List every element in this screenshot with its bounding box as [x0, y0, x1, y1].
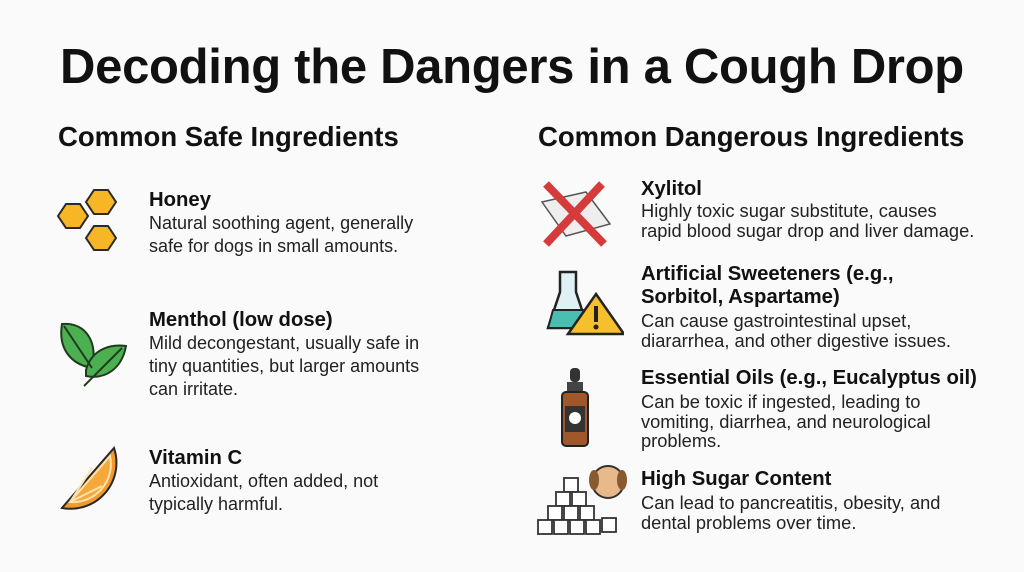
item: high sugar: dental problems over time. [641, 512, 856, 533]
item: essential oils: problems. [641, 430, 721, 451]
icon: mint leaves [60, 322, 128, 387]
item: honey: Natural soothing agent, generally [149, 213, 413, 233]
item: artificial sweeteners: Can cause gastrointestinal upset, [641, 310, 911, 331]
item: xylitol [641, 178, 974, 241]
item: high sugar: Can lead to pancreatitis, obesity, and [641, 492, 940, 513]
icon: sugar cubes and dog [537, 465, 627, 535]
icon: xylitol crossed [540, 181, 612, 247]
item: xylitol: Xylitol [641, 178, 702, 200]
item: vitamin c [149, 447, 378, 514]
item: vitamin c: Vitamin C [149, 447, 242, 469]
icon: honeycomb [56, 189, 118, 251]
item: menthol: Menthol (low dose) [149, 309, 333, 331]
icon: poison bottle [561, 368, 589, 447]
item: essential oils [641, 367, 977, 451]
item: vitamin c: typically harmful. [149, 494, 283, 514]
heading: dangerous: Common Dangerous Ingredients [538, 121, 964, 152]
item: xylitol: rapid blood sugar drop and liver damage. [641, 220, 974, 241]
item: high sugar: High Sugar Content [641, 468, 831, 490]
item: artificial sweeteners [641, 263, 951, 351]
item: high sugar [641, 468, 940, 533]
item: artificial sweeteners: Artificial Sweeteners (e.g., [641, 263, 893, 285]
heading: safe: Common Safe Ingredients [58, 121, 399, 152]
item: menthol [149, 309, 419, 399]
item: essential oils: vomiting, diarrhea, and neurological [641, 410, 931, 432]
item: honey [149, 189, 414, 256]
item: menthol: tiny quantities, but larger amounts [149, 356, 419, 376]
item: xylitol: Highly toxic sugar substitute, causes [641, 200, 937, 221]
item: menthol: can irritate. [149, 379, 238, 399]
item: menthol: Mild decongestant, usually safe in [149, 333, 419, 353]
item: honey: Honey [149, 189, 211, 211]
item: artificial sweeteners: diararrhea, and other digestive issues. [641, 330, 951, 351]
icon: orange slice [60, 446, 118, 510]
item: honey: safe for dogs in small amounts. [149, 236, 398, 256]
item: essential oils: Essential Oils (e.g., Eucalyptus oil) [641, 367, 977, 389]
item: essential oils: Can be toxic if ingested, leading to [641, 391, 920, 412]
icon: flask warning [546, 270, 624, 336]
item: artificial sweeteners: Sorbitol, Aspartame) [641, 286, 840, 308]
title: Decoding the Dangers in a Cough Drop [60, 40, 964, 94]
item: vitamin c: Antioxidant, often added, not [149, 471, 378, 491]
